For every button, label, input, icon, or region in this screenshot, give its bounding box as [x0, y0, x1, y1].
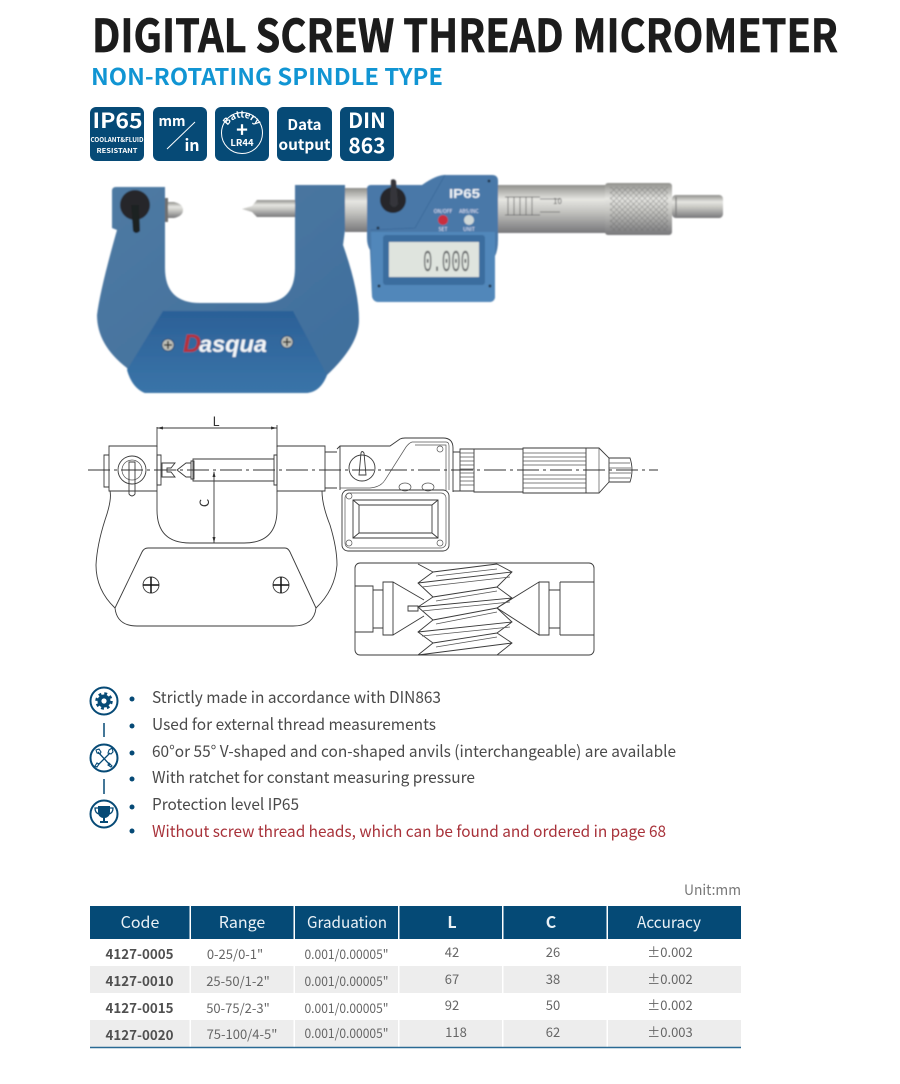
- table header: Range: [219, 909, 265, 933]
- row 4127-0015: [106, 995, 693, 1017]
- logo: D: [183, 330, 201, 358]
- display buttons: [434, 208, 479, 233]
- row 4127-0010: 67: [445, 969, 459, 988]
- row 4127-0010: ±0.002: [647, 969, 693, 988]
- feature icons: [90, 688, 118, 828]
- technical drawing: front view: [88, 411, 658, 626]
- badge: data output: output: [278, 134, 331, 155]
- badge: DIN 863: DIN: [348, 105, 386, 135]
- table header: [90, 906, 741, 939]
- row 4127-0020: 62: [546, 1022, 560, 1041]
- drawn plate: [115, 548, 316, 626]
- badge: battery LR44: LR44: [230, 135, 254, 149]
- plate screws: [162, 336, 293, 351]
- row 4127-0005: 0-25/0-1": [207, 944, 263, 963]
- badge: DIN 863: 863: [348, 130, 386, 160]
- badge: IP65: IP65: [92, 105, 142, 135]
- row 4127-0015: ±0.002: [647, 995, 693, 1014]
- display buttons: ABS/INC: [459, 208, 479, 215]
- drawn screws: [143, 577, 289, 593]
- display buttons: SET: [439, 226, 447, 233]
- row 4127-0015: 4127-0015: [106, 997, 174, 1017]
- row 4127-0005: 26: [546, 942, 560, 961]
- row 4127-0005: 0.001/0.00005": [304, 944, 388, 963]
- row 4127-0010: 25-50/1-2": [206, 971, 270, 990]
- dimension L: [157, 411, 277, 447]
- scale marks: 10: [553, 196, 562, 207]
- row 4127-0010: 38: [546, 969, 560, 988]
- badge: data output: Data: [287, 114, 322, 135]
- row 4127-0010: 0.001/0.00005": [304, 971, 388, 990]
- icon: tools: [90, 744, 118, 772]
- center line: [88, 469, 658, 471]
- unit label: Unit:mm: [684, 879, 741, 900]
- feature list: Used for external thread measurements: [152, 711, 436, 735]
- feature list: With ratchet for constant measuring pressure: [152, 764, 475, 788]
- row 4127-0005: 4127-0005: [106, 943, 174, 963]
- badge: IP65: RESISTANT: [96, 145, 138, 155]
- row 4127-0015: 50-75/2-3": [206, 998, 270, 1017]
- table header: Graduation: [307, 909, 387, 933]
- product photo: micrometer: [97, 175, 723, 393]
- micrometer sleeve: [498, 185, 606, 233]
- badge: mm / in: mm: [158, 111, 186, 131]
- scale marks: [505, 196, 562, 215]
- table header: Accuracy: [637, 909, 702, 933]
- row 4127-0015: 92: [445, 995, 459, 1014]
- IP65 label: IP65: [449, 186, 480, 201]
- display buttons: ON/OFF: [434, 208, 452, 215]
- drawn knob: [118, 456, 146, 496]
- table header: L: [447, 909, 457, 933]
- steel barrel: [345, 188, 369, 232]
- row 4127-0015: 0.001/0.00005": [304, 998, 388, 1017]
- ratchet end: [672, 195, 723, 218]
- badge: battery LR44: +: [236, 114, 248, 143]
- feature list: Strictly made in accordance with DIN863: [152, 684, 441, 708]
- knurled thimble: [605, 183, 672, 235]
- frame outline: [104, 446, 337, 491]
- dimension C: C: [194, 499, 213, 507]
- row 4127-0010: [106, 969, 693, 990]
- name plate: [127, 311, 327, 393]
- feature badges: [90, 105, 394, 161]
- LCD screen: [383, 235, 485, 285]
- feature list: Without screw thread heads, which can be found and ordered in page 68: [152, 818, 666, 842]
- screw thread: [418, 564, 512, 655]
- row 4127-0020: 4127-0020: [106, 1024, 174, 1044]
- feature list: [130, 684, 676, 842]
- row 4127-0010: 4127-0010: [106, 970, 174, 990]
- LCD screen: 0.000: [423, 246, 470, 281]
- badge: data output: [277, 107, 332, 161]
- row 4127-0005: [106, 942, 693, 963]
- row 4127-0020: 0.001/0.00005": [304, 1023, 388, 1042]
- badge: mm / in: [153, 107, 207, 161]
- left anvil: [355, 582, 424, 635]
- row 4127-0020: ±0.003: [647, 1022, 693, 1041]
- badge: DIN 863: [340, 105, 394, 161]
- row 4127-0020: 75-100/4-5": [207, 1024, 277, 1043]
- digital display housing: [367, 175, 498, 302]
- badge: mm / in: in: [184, 132, 200, 156]
- drawn anvil and spindle: [157, 455, 277, 485]
- drawn display head: [337, 438, 453, 551]
- dimension C: [194, 471, 216, 543]
- specification table: [90, 906, 741, 1048]
- row 4127-0020: 118: [445, 1022, 467, 1041]
- badge: IP65: [90, 105, 144, 161]
- thread detail drawing: [355, 563, 594, 655]
- row shading: [90, 966, 741, 1047]
- feature list: Protection level IP65: [152, 791, 299, 815]
- logo: asqua: [199, 331, 267, 357]
- frame body curves: [96, 491, 337, 608]
- badge: IP65: COOLANT&FLUID: [90, 134, 144, 144]
- badge: battery LR44: Battery: [222, 110, 261, 126]
- feature list: 60°or 55° V-shaped and con-shaped anvils (interchangeable) are available: [152, 738, 676, 762]
- icon: gear: [90, 688, 118, 714]
- row 4127-0020: [106, 1022, 693, 1044]
- dimension L: L: [212, 411, 220, 430]
- row 4127-0005: ±0.002: [647, 942, 693, 961]
- spindle and anvil: [163, 198, 295, 222]
- table header: C: [546, 909, 557, 933]
- right anvil: [497, 582, 594, 635]
- drawn sleeve and thimble: [453, 448, 632, 493]
- row 4127-0015: 50: [546, 995, 560, 1014]
- display buttons: UNIT: [463, 226, 475, 233]
- table header: Code: [121, 909, 159, 933]
- right lock knob: [380, 179, 406, 213]
- subtitle: NON-ROTATING SPINDLE TYPE: [91, 58, 443, 92]
- left lock knob: [120, 190, 150, 233]
- badge: battery LR44: [215, 107, 269, 161]
- list bullets: [130, 696, 134, 834]
- icon: trophy: [90, 800, 118, 828]
- row 4127-0005: 42: [445, 942, 459, 961]
- blue frame: [97, 185, 359, 393]
